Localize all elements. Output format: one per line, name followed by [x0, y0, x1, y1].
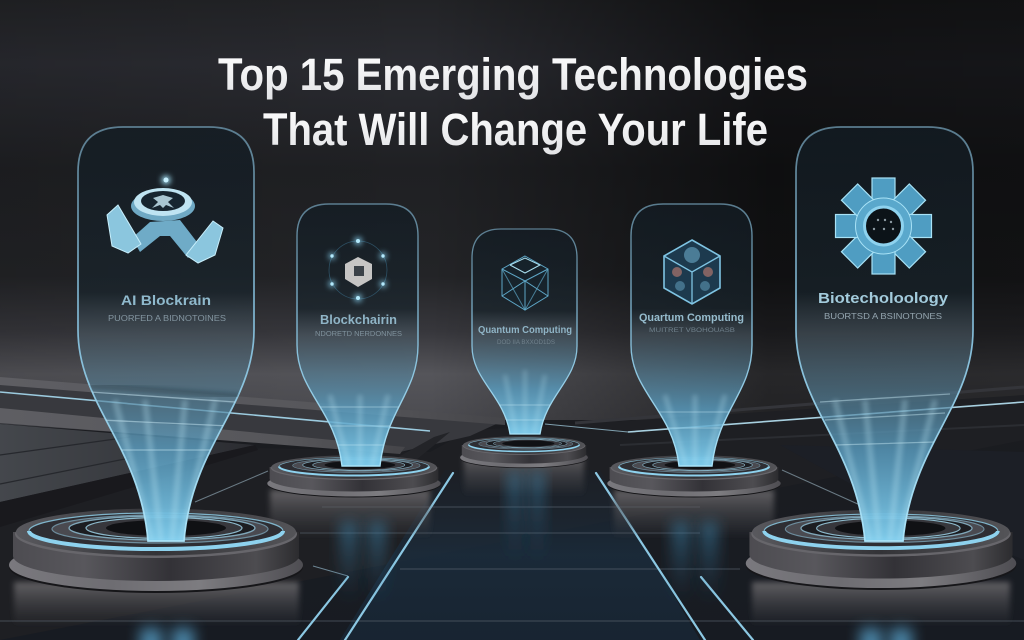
pedestal: inner right	[607, 455, 781, 498]
back rail left	[0, 377, 505, 470]
title: Top 15 Emerging Technologies	[218, 49, 808, 100]
icon: blockchain hexagon	[328, 237, 387, 302]
label: Quantum Computing: Quartum Computing	[639, 312, 744, 324]
sublabel: MUITRET VBOHOUASB	[649, 327, 735, 334]
label: Quantum Computing: Quantum Computing	[478, 324, 572, 336]
back rail right	[545, 387, 1024, 445]
floor	[0, 377, 1024, 640]
floor light lines	[298, 473, 753, 640]
icon: gear cell	[836, 178, 932, 274]
panel: Quantum Computing right	[631, 204, 752, 466]
panel: AI Blockchain	[78, 127, 254, 541]
pedestal reflections	[14, 456, 1010, 640]
sublabel: BUORTSD A BSINOTONES	[824, 312, 942, 321]
label: Blockchain: Blockchairin	[320, 312, 397, 327]
label: AI Blockchain: AI Blockrain	[121, 293, 211, 308]
icon: wireframe cube	[502, 256, 548, 310]
right deck	[780, 445, 1024, 560]
title: That Will Change Your Life	[263, 104, 768, 155]
sublabel: NDORETD NERDONNES	[315, 331, 402, 338]
pedestal: front left	[9, 508, 303, 593]
pedestal: inner left	[267, 455, 441, 498]
pedestal: center back	[460, 436, 588, 468]
label: Biotechnology: Biotecholoology	[818, 290, 949, 307]
pedestal: front right	[746, 510, 1016, 590]
panel: Quantum Computing center	[472, 229, 577, 434]
sublabel: DOD IIA BXXOD1DS	[497, 340, 555, 346]
sublabel: PUORFED A BIDNOTOINES	[108, 314, 226, 323]
background wall	[0, 0, 1024, 425]
title	[218, 49, 808, 155]
panel: Biotechnology	[796, 127, 973, 541]
icon: quantum cube	[664, 240, 720, 304]
panel: Blockchain	[297, 204, 418, 466]
left deck	[0, 424, 255, 502]
icon: robotic arm with disc	[107, 176, 223, 263]
center floor sheen	[340, 470, 700, 640]
